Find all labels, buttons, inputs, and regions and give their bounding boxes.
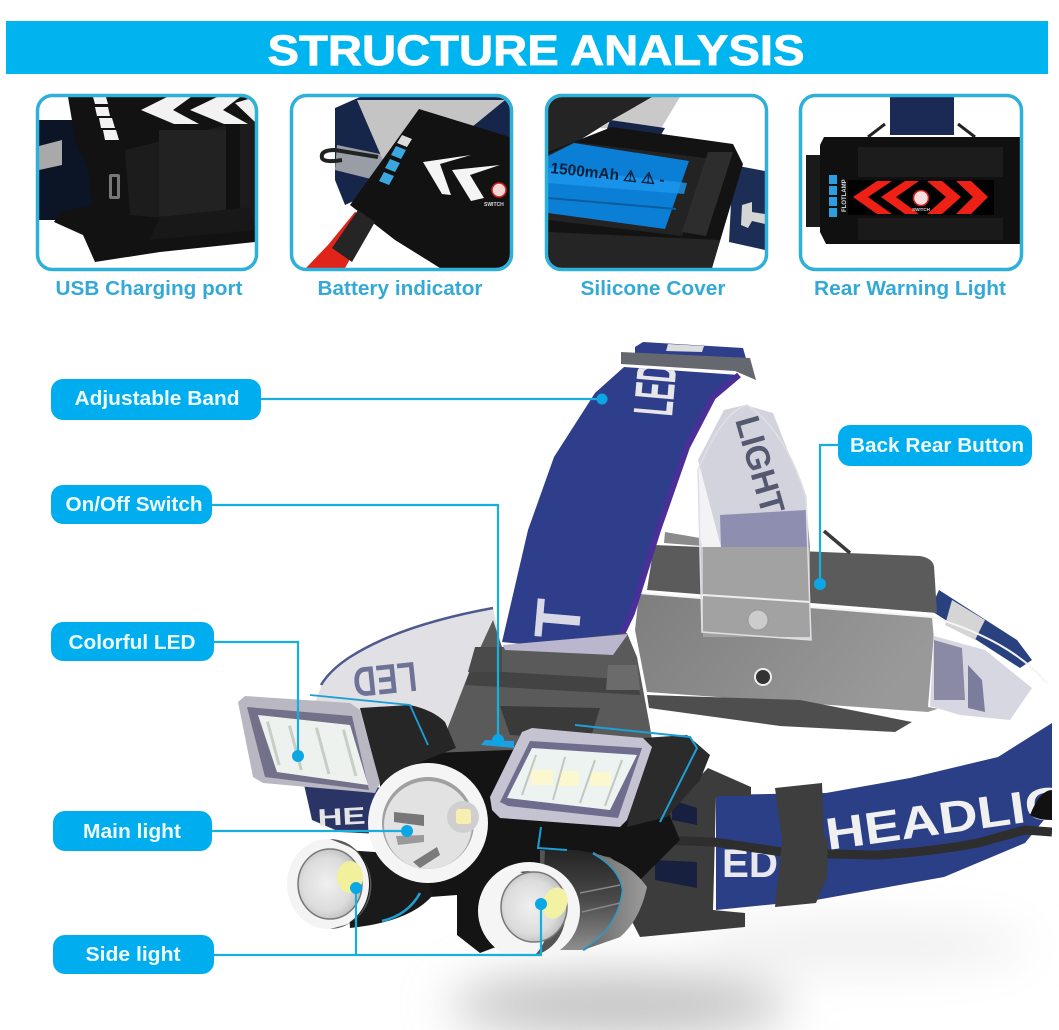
title banner: [6, 21, 1048, 75]
bracket: [632, 768, 751, 937]
thumbnail caption: USB: USB Charging port: [56, 278, 243, 300]
callout: Main light: [53, 811, 413, 851]
cable clip: [775, 783, 828, 907]
callout: Back Rear Button: Back Rear Button: [850, 435, 1024, 457]
floor shadow: [450, 923, 1030, 1030]
callout: Colorful LED: Colorful LED: [68, 632, 196, 654]
right side light: [478, 827, 647, 960]
dark battery box: [647, 545, 937, 613]
elastic head band: T: [521, 596, 596, 642]
panel: rear warning light: SWITCH: [912, 207, 930, 212]
title banner: STRUCTURE ANALYSIS: [268, 27, 804, 75]
left side light: [287, 839, 433, 929]
cable: [600, 830, 1052, 855]
left colourful LED body: [310, 695, 456, 785]
left inner strap: [310, 608, 500, 735]
callout: On/Off Switch: On/Off Switch: [66, 494, 202, 516]
callout: Adjustable Band: Adjustable Band: [74, 388, 240, 410]
elastic head band: [502, 361, 739, 653]
panel: rear warning light: [800, 96, 1022, 270]
band top and buckle: [621, 342, 756, 380]
hole: [755, 669, 771, 685]
callout: Side light: [53, 882, 547, 974]
panel: USB charging port: [38, 96, 256, 270]
callout: On/Off Switch: [51, 485, 504, 746]
lower elastic strap: [716, 723, 1059, 910]
thumbnail caption: silicone: Silicone Cover: [580, 278, 726, 300]
left inner strap: LED: [351, 653, 419, 706]
lower elastic strap: ED: [722, 842, 778, 886]
left navy strap section: HE: [317, 803, 366, 832]
small hardware behind box: [664, 532, 702, 546]
central housing: [440, 620, 655, 760]
rear elastic strap: [930, 590, 1032, 668]
headlamp illustration: [238, 342, 1059, 960]
clear plate: [698, 405, 811, 640]
panel: battery indicator: [292, 96, 512, 270]
callout: Main light: Main light: [83, 821, 181, 843]
main light: [368, 763, 488, 883]
panel: rear warning light: FLOTLAMP: [842, 179, 848, 212]
left navy strap section: [304, 786, 380, 834]
panel: battery indicator: SWITCH: [484, 202, 504, 208]
coil: [1030, 790, 1052, 820]
callout: Back Rear Button: [814, 425, 1032, 590]
dark strip under plate: [647, 695, 912, 732]
callout: Adjustable Band: [51, 379, 608, 420]
lower dark body behind lights: [380, 745, 680, 953]
right colourful LED panel: [490, 728, 652, 827]
power button base: [481, 740, 514, 748]
headlamp illustration: LED: [621, 361, 688, 418]
right colourful LED body: [575, 725, 710, 827]
panel: silicone cover: [546, 96, 766, 270]
right strap seen through clear band: [928, 636, 1032, 720]
panel: silicone cover: 1500mAh ⚠ ⚠ -: [550, 160, 666, 189]
grey plate: [635, 593, 940, 712]
left colourful LED panel: [238, 696, 380, 793]
callout: Side light: Side light: [86, 944, 181, 966]
clear plate: LIGHT: [727, 412, 791, 519]
thumbnail caption: rear: Rear Warning Light: [814, 278, 1006, 300]
callout: Colorful LED: [51, 622, 304, 762]
thumbnail caption: battery: Battery indicator: [318, 278, 483, 300]
